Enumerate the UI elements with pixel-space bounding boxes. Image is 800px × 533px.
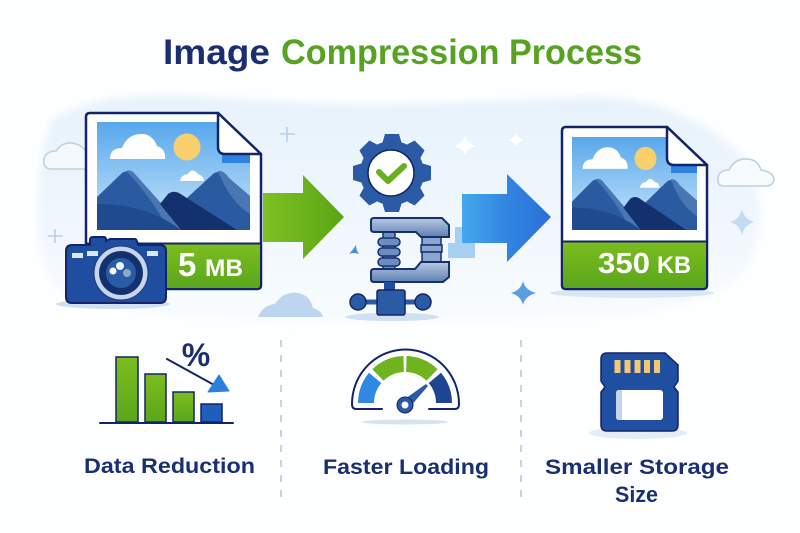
white sparkle two xyxy=(508,132,524,148)
photo thumbnail xyxy=(97,122,250,230)
divider one xyxy=(280,340,282,500)
green segment left xyxy=(372,356,404,381)
file shadow xyxy=(550,288,714,298)
chart: data reduction bars xyxy=(100,337,233,423)
title: Image xyxy=(163,33,270,72)
block xyxy=(377,290,405,315)
check mark xyxy=(379,166,404,181)
fold shadow xyxy=(671,166,697,173)
icon: bottom cloud xyxy=(258,293,323,317)
icon: memory card xyxy=(589,353,687,439)
card window xyxy=(616,390,663,420)
size label 5 MB: 5 xyxy=(178,246,196,283)
size label 5 MB: MB xyxy=(205,255,243,282)
arrow: blue xyxy=(462,174,551,262)
handle knob right xyxy=(415,294,431,310)
icon: gear with check xyxy=(353,134,431,212)
panel: original 5 MB file xyxy=(86,113,261,289)
size label 350 KB: KB xyxy=(657,252,691,279)
icon: clamp xyxy=(345,218,449,321)
divider two xyxy=(520,340,522,500)
handle xyxy=(364,300,416,304)
icon: right outline cloud xyxy=(718,159,774,186)
needle xyxy=(397,384,428,413)
small blue sparkle xyxy=(349,245,359,254)
card body xyxy=(601,353,678,431)
pixel trail xyxy=(448,227,475,258)
size label 350 KB xyxy=(598,248,691,280)
title: Compression Process xyxy=(281,33,642,72)
pale sparkle right xyxy=(730,209,754,235)
blue sparkle xyxy=(511,281,536,305)
size label 5 MB xyxy=(178,246,243,283)
card shadow xyxy=(589,427,687,439)
dark segment xyxy=(429,373,452,403)
page fold xyxy=(667,127,707,165)
label: smaller storage size: Smaller Storage xyxy=(545,456,729,479)
gauge shadow xyxy=(362,420,448,424)
left screw xyxy=(378,232,400,272)
fold shadow xyxy=(222,155,250,163)
arrow: green xyxy=(263,175,344,259)
bottom jaw xyxy=(371,262,449,282)
green size band xyxy=(87,244,260,288)
label: faster loading: Faster Loading xyxy=(323,456,489,479)
green size band xyxy=(563,242,706,288)
file page xyxy=(86,113,261,289)
contacts xyxy=(614,360,660,373)
icon: camera xyxy=(56,237,170,309)
handle knob left xyxy=(350,294,366,310)
background blob xyxy=(38,96,760,323)
icon: left plus xyxy=(48,127,295,243)
camera lens xyxy=(94,246,148,300)
stem xyxy=(384,282,395,291)
clamp base shadow xyxy=(345,313,439,321)
green segment right xyxy=(406,356,438,381)
label: data reduction: Data Reduction xyxy=(84,455,255,478)
band divider xyxy=(87,242,261,244)
white sparkle one xyxy=(454,135,476,156)
gear xyxy=(353,134,431,212)
band divider xyxy=(562,240,707,242)
axis xyxy=(100,422,233,424)
percent sign: % xyxy=(182,337,210,373)
page fold xyxy=(218,113,261,154)
panel: compressed 350 KB file xyxy=(550,127,714,298)
icon: left outline cloud xyxy=(44,143,85,169)
size label 350 KB: 350 xyxy=(598,248,650,280)
blue segment xyxy=(358,373,381,403)
camera shadow xyxy=(56,299,170,309)
sparkles xyxy=(349,132,754,305)
window shade xyxy=(616,390,622,420)
label: smaller storage size xyxy=(545,456,729,507)
gauge outline xyxy=(352,349,459,409)
top jaw xyxy=(371,218,449,237)
camera body xyxy=(66,237,166,303)
camera buttons xyxy=(72,251,158,258)
icon: speed gauge xyxy=(352,349,459,424)
label: smaller storage size: Size xyxy=(615,482,658,507)
gear centre xyxy=(368,150,414,196)
photo thumbnail xyxy=(572,137,697,230)
bars xyxy=(116,357,222,422)
down arrow xyxy=(167,359,229,392)
right screw xyxy=(421,237,442,262)
file page xyxy=(562,127,707,289)
